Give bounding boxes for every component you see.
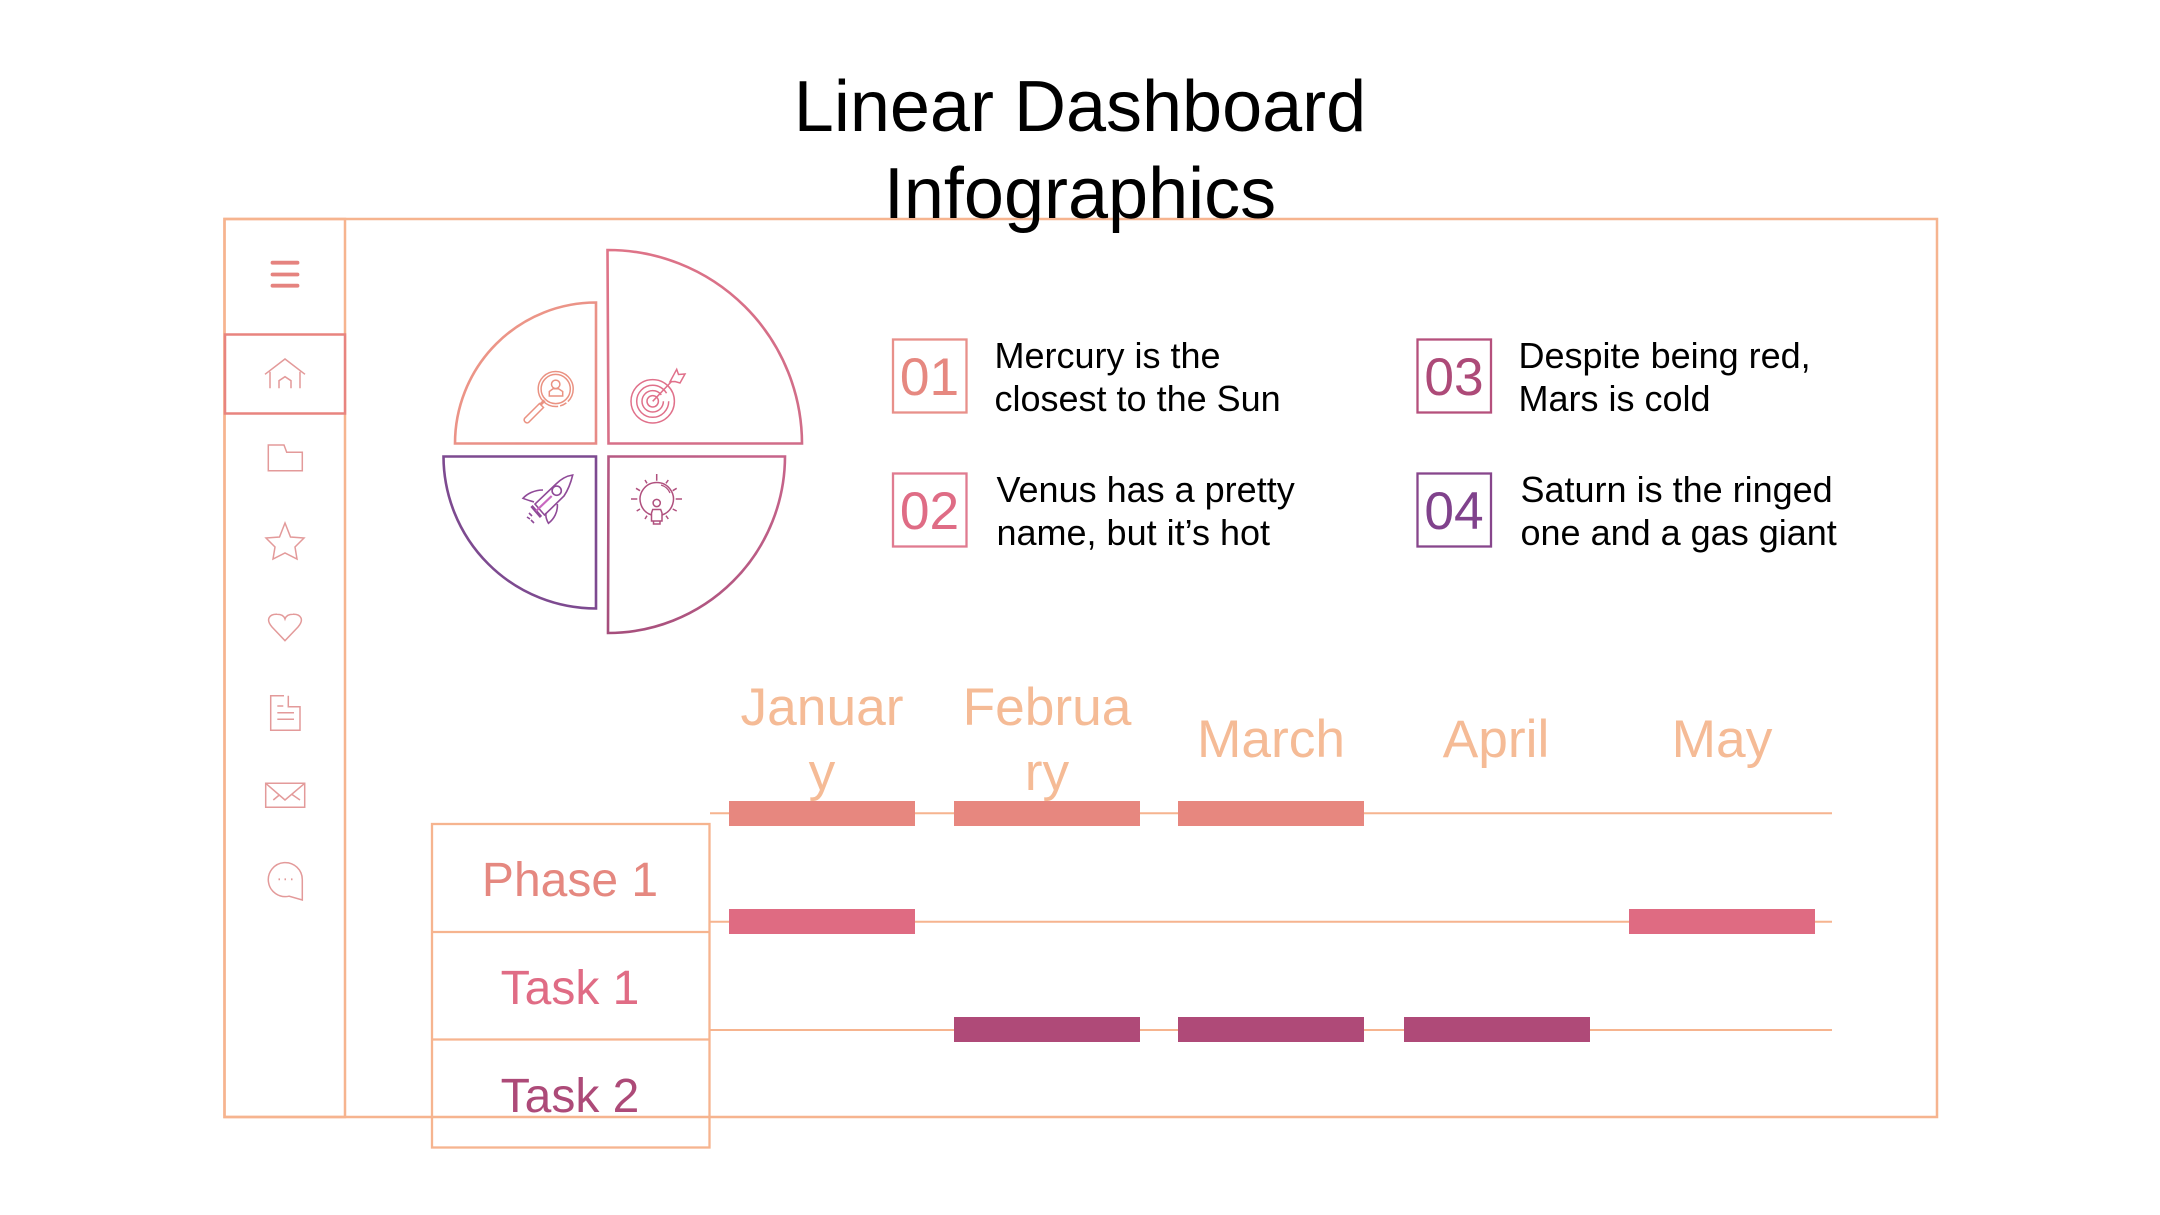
icon: home: [265, 359, 305, 388]
month labels: [741, 678, 1773, 802]
month labels: Januar: [741, 678, 903, 737]
month labels: April: [1443, 710, 1549, 769]
item 02: Venus has a pretty: [996, 469, 1295, 510]
icon: light bulb: [631, 474, 682, 524]
item 01: 01: [900, 348, 959, 407]
icon: rocket: [523, 475, 573, 523]
title: Infographics: [884, 154, 1276, 234]
icon: heart: [269, 614, 301, 641]
month labels: May: [1672, 710, 1773, 769]
pie chart: [444, 250, 802, 633]
home highlight box: [225, 334, 345, 414]
wedge: bottom left: [444, 456, 596, 608]
icon: menu: [272, 263, 298, 286]
wedge: top left: [455, 302, 596, 444]
row: phase 1 bars: [729, 801, 1364, 826]
item 04: 04: [1424, 482, 1484, 541]
month labels: y: [809, 743, 836, 802]
item 03: [1418, 335, 1811, 419]
legend: [893, 335, 1837, 553]
title: Linear Dashboard: [794, 67, 1366, 147]
item 02: [893, 469, 1295, 553]
icon: chat: [268, 863, 302, 900]
table: phases and tasks: Task 1: [501, 962, 639, 1015]
month labels: March: [1197, 710, 1345, 769]
item 01: [893, 335, 1281, 419]
table: phases and tasks: Phase 1: [482, 854, 658, 907]
row: task 2 bars: [954, 1017, 1590, 1042]
item 01: closest to the Sun: [994, 378, 1281, 419]
item 03: 03: [1424, 348, 1484, 407]
item 04: [1418, 469, 1837, 553]
table: phases and tasks: Task 2: [501, 1070, 639, 1123]
table: phases and tasks: [432, 824, 710, 1148]
icon: document: [271, 696, 300, 730]
wedge: bottom right: [608, 456, 785, 633]
dashboard frame: [224, 219, 1937, 1117]
icon: mail: [266, 783, 305, 807]
item 04: one and a gas giant: [1520, 512, 1837, 553]
row: task 1 bars: [729, 909, 1815, 934]
icon: magnifier: [524, 372, 573, 423]
icon: star: [266, 523, 304, 559]
item 03: Mars is cold: [1518, 378, 1711, 419]
wedge: top right: [608, 250, 802, 444]
month labels: ry: [1025, 743, 1070, 802]
item 02: 02: [900, 482, 959, 541]
gantt chart: [710, 678, 1832, 1042]
icon: target: [631, 369, 685, 423]
icon: folder: [268, 445, 302, 471]
item 04: Saturn is the ringed: [1520, 469, 1833, 510]
month labels: Februa: [963, 678, 1132, 737]
item 02: name, but it’s hot: [996, 512, 1270, 553]
grid lines: [710, 813, 1832, 1030]
title: [794, 67, 1366, 234]
item 01: Mercury is the: [994, 335, 1221, 376]
item 03: Despite being red,: [1518, 335, 1811, 376]
panel: sidebar: [224, 219, 345, 1117]
